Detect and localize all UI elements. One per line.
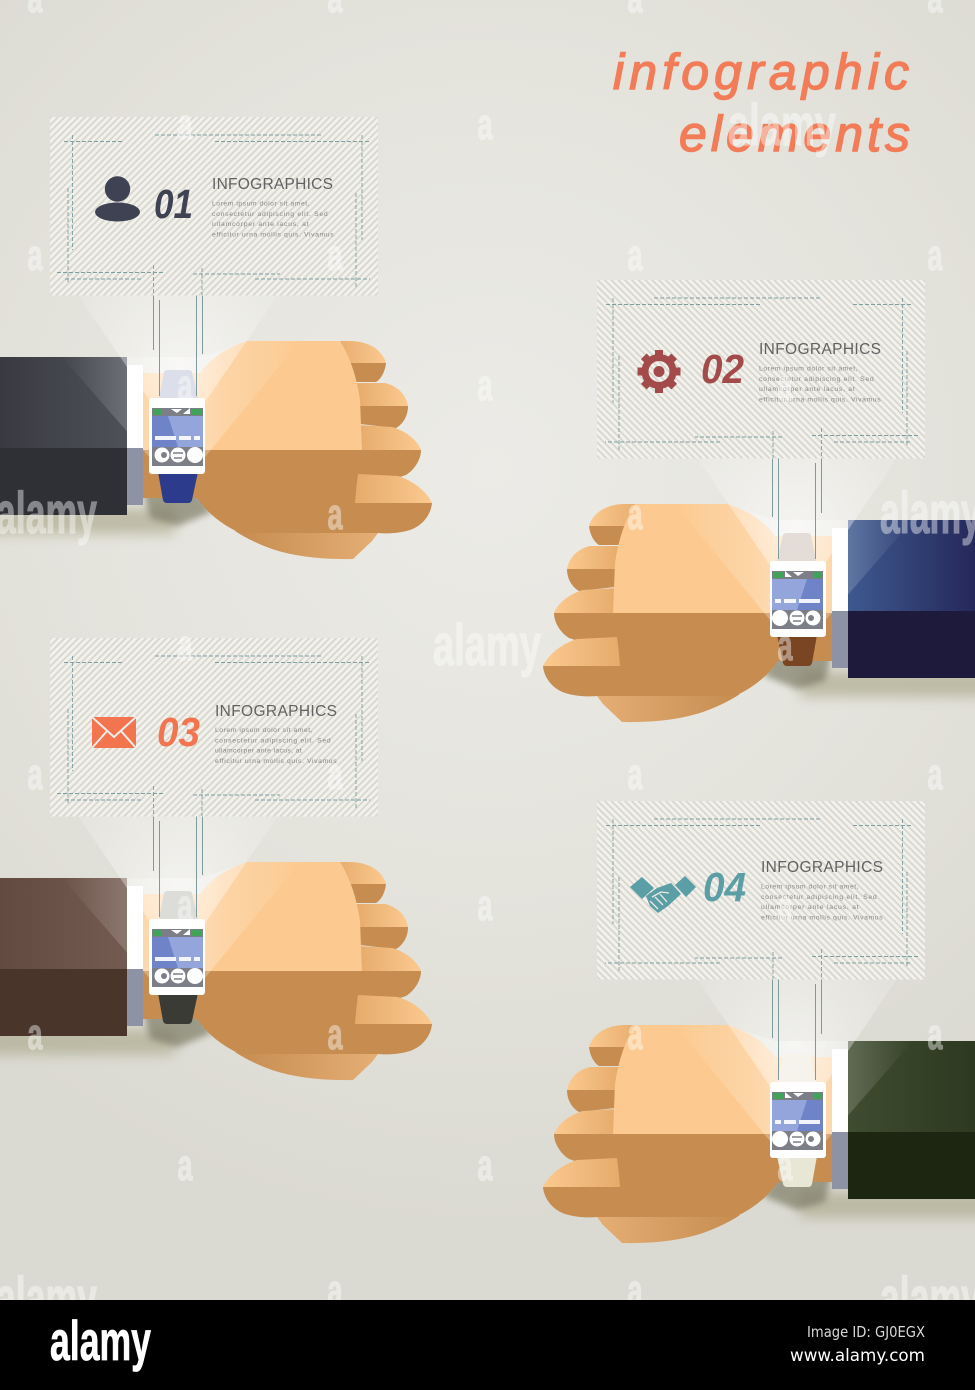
watermarks: a bbox=[778, 621, 793, 670]
hand with watch 2 bbox=[543, 450, 975, 722]
body text 4: Lorem ipsum dolor sit amet, bbox=[761, 884, 859, 890]
heading 2: INFOGRAPHICS bbox=[759, 341, 881, 358]
icon: handshake bbox=[630, 876, 696, 913]
body text 4: efficitur urna mollis quis. Vivamus bbox=[761, 914, 883, 922]
title: elements bbox=[679, 106, 910, 162]
watermarks: a bbox=[628, 1266, 643, 1315]
body text 3: consectetur adipiscing elit. Sed bbox=[215, 738, 331, 744]
footer logo: alamy bbox=[50, 1309, 151, 1372]
body text 2: consectetur adipiscing elit. Sed bbox=[759, 376, 874, 383]
watermarks: a bbox=[478, 100, 493, 149]
website: www.alamy.com bbox=[790, 1346, 925, 1366]
panel 4 bbox=[597, 801, 925, 980]
body text 1 bbox=[212, 200, 334, 238]
watermarks: alamy bbox=[0, 1266, 97, 1331]
body text 3: efficitur urna mollis quis. Vivamus bbox=[215, 758, 337, 765]
watermarks: a bbox=[178, 621, 193, 670]
watermarks: a bbox=[928, 1010, 943, 1059]
icon: person bbox=[95, 176, 140, 222]
watermarks: a bbox=[28, 231, 43, 280]
watermarks: a bbox=[178, 361, 193, 410]
body text 1: consectetur adipiscing elit. Sed bbox=[212, 211, 328, 218]
image id: Image ID: GJ0EGX bbox=[807, 1323, 925, 1341]
watermarks: a bbox=[328, 490, 343, 539]
heading 1: INFOGRAPHICS bbox=[212, 176, 333, 193]
watermarks: a bbox=[778, 1141, 793, 1190]
body text 3 bbox=[215, 727, 337, 765]
watermarks: a bbox=[478, 1141, 493, 1190]
heading 4: INFOGRAPHICS bbox=[761, 859, 883, 876]
icon: envelope bbox=[92, 717, 136, 748]
watermarks: a bbox=[178, 100, 193, 149]
watermarks: a bbox=[628, 490, 643, 539]
panel 3 bbox=[50, 638, 378, 816]
watermarks: alamy bbox=[0, 481, 97, 546]
panel 2 bbox=[597, 280, 925, 458]
watermarks: a bbox=[328, 1010, 343, 1059]
body text 1: efficitur urna mollis quis. Vivamus bbox=[212, 232, 334, 238]
number 03: 03 bbox=[157, 709, 200, 755]
watermarks: a bbox=[628, 1010, 643, 1059]
watermarks: a bbox=[628, 750, 643, 799]
number 02: 02 bbox=[701, 346, 744, 392]
body text 4: ullamcorper ante lacus, at bbox=[761, 904, 859, 911]
title: infographic bbox=[613, 44, 909, 100]
body text 2 bbox=[759, 366, 881, 404]
watermarks: a bbox=[478, 881, 493, 930]
body text 2: ullamcorper ante lacus, at bbox=[759, 386, 855, 393]
heading 3: INFOGRAPHICS bbox=[215, 703, 337, 720]
watermarks: a bbox=[928, 231, 943, 280]
watermarks: a bbox=[28, 1010, 43, 1059]
panel 1 bbox=[50, 117, 378, 296]
number 01: 01 bbox=[154, 181, 193, 227]
body text 2: efficitur urna mollis quis. Vivamus bbox=[759, 396, 881, 404]
watermarks: a bbox=[328, 231, 343, 280]
hand with watch 4 bbox=[543, 971, 975, 1243]
watermarks: a bbox=[778, 881, 793, 930]
body text 3: ullamcorper ante lacus, at bbox=[215, 748, 302, 754]
watermarks: a bbox=[178, 1141, 193, 1190]
watermarks: a bbox=[928, 750, 943, 799]
watermarks: a bbox=[328, 750, 343, 799]
body text 4: consectetur adipiscing elit. Sed bbox=[761, 894, 877, 901]
watermarks: a bbox=[478, 361, 493, 410]
watermarks: a bbox=[178, 881, 193, 930]
watermarks: a bbox=[328, 1266, 343, 1315]
body text 1: ullamcorper ante lacus, at bbox=[212, 221, 309, 228]
body text 3: Lorem ipsum dolor sit amet, bbox=[215, 727, 313, 734]
watermarks: alamy bbox=[433, 613, 541, 678]
watermarks: a bbox=[778, 361, 793, 410]
body text 4 bbox=[761, 884, 883, 922]
hand with watch 3 bbox=[0, 808, 432, 1080]
watermarks: a bbox=[28, 750, 43, 799]
body text 1: Lorem ipsum dolor sit amet, bbox=[212, 200, 310, 208]
watermarks: a bbox=[628, 231, 643, 280]
body text 2: Lorem ipsum dolor sit amet, bbox=[759, 366, 858, 372]
footer bar bbox=[0, 1300, 975, 1390]
title bbox=[613, 44, 910, 162]
number 04: 04 bbox=[703, 864, 746, 910]
hand with watch 1 bbox=[0, 287, 432, 559]
icon: gear bbox=[638, 350, 680, 393]
watermarks: alamy bbox=[728, 93, 836, 158]
